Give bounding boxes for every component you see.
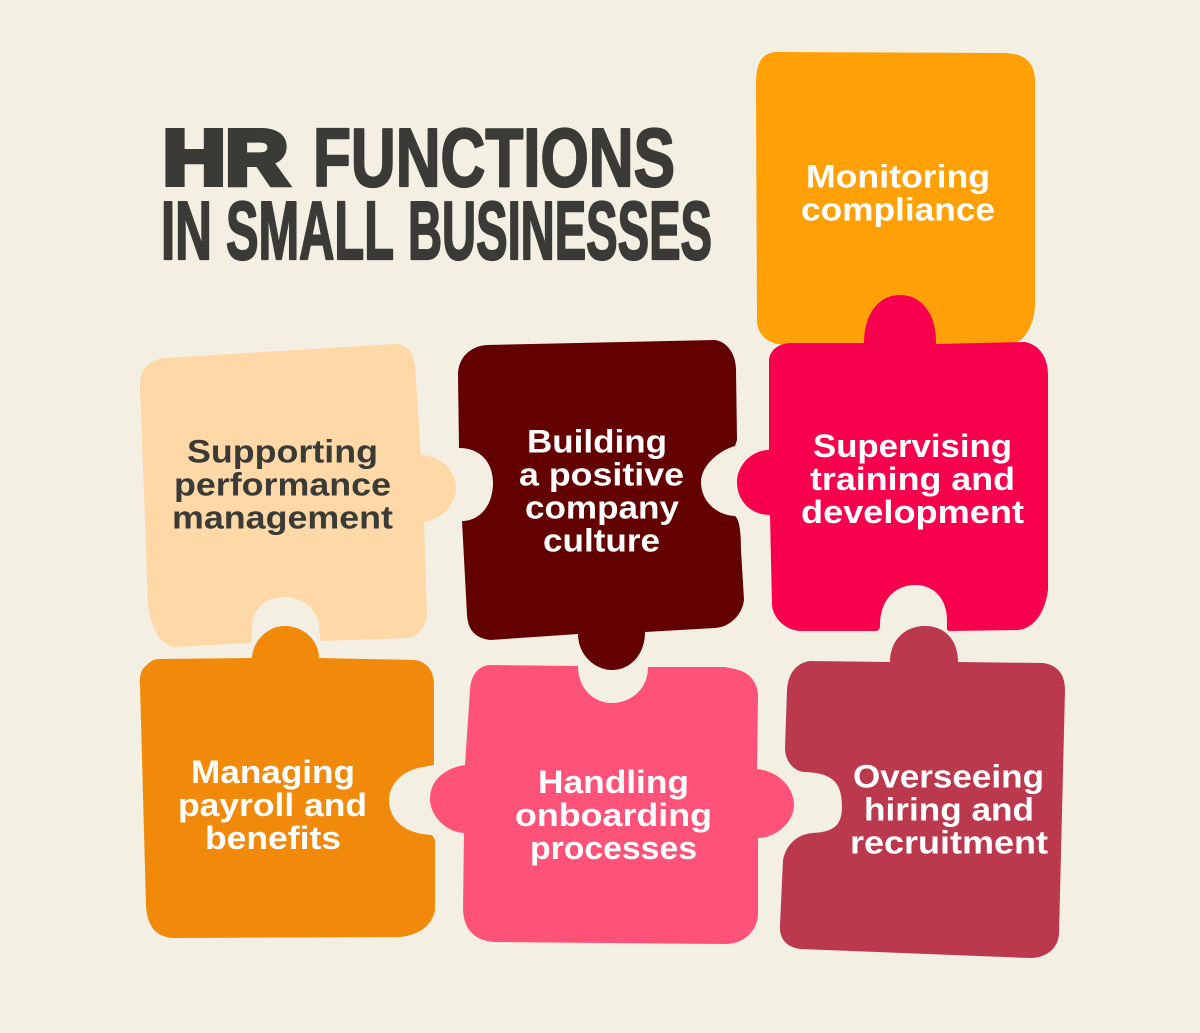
panel: company culture puzzle piece: company [525,490,679,526]
panel: onboarding processes puzzle piece: onboarding [515,797,712,833]
title: HR [163,115,288,201]
panel: performance management puzzle piece: Supporting [187,434,378,470]
title [161,111,712,277]
panel: monitoring compliance puzzle piece [756,52,1035,345]
panel: company culture puzzle piece [458,340,744,670]
panel: payroll and benefits puzzle piece: Managing [191,754,355,790]
title: IN [161,184,212,277]
panel: supervising training puzzle piece: Supervising [813,428,1012,464]
panel: payroll and benefits puzzle piece [140,626,435,938]
panel: hiring and recruitment puzzle piece: Overseeing [853,758,1044,794]
panel: onboarding processes puzzle piece: processes [530,830,697,866]
panel: onboarding processes puzzle piece: Handling [538,764,689,800]
title: FUNCTIONS [313,111,675,204]
panel: hiring and recruitment puzzle piece [780,626,1065,958]
panel: company culture puzzle piece: a positive [519,456,684,492]
panel: company culture puzzle piece: culture [543,522,660,558]
panel: supervising training puzzle piece: development [801,494,1024,530]
panel: supervising training puzzle piece: training and [810,461,1015,497]
panel: monitoring compliance puzzle piece: compliance [801,192,995,228]
panel: supervising training puzzle piece [737,295,1048,631]
panel: payroll and benefits puzzle piece: benefits [205,820,341,856]
panel: performance management puzzle piece: performance [174,466,391,502]
panel: performance management puzzle piece: management [172,500,393,536]
panel: hiring and recruitment puzzle piece: hiring and [864,792,1034,828]
panel: performance management puzzle piece [140,344,456,647]
panel: payroll and benefits puzzle piece: payroll and [178,787,367,823]
panel: company culture puzzle piece: Building [527,424,667,460]
panel: monitoring compliance puzzle piece: Monitoring [806,158,990,194]
title: BUSINESSES [408,184,712,277]
panel: hiring and recruitment puzzle piece: recruitment [850,824,1048,860]
panel: onboarding processes puzzle piece [430,665,794,944]
title: SMALL [226,184,394,277]
